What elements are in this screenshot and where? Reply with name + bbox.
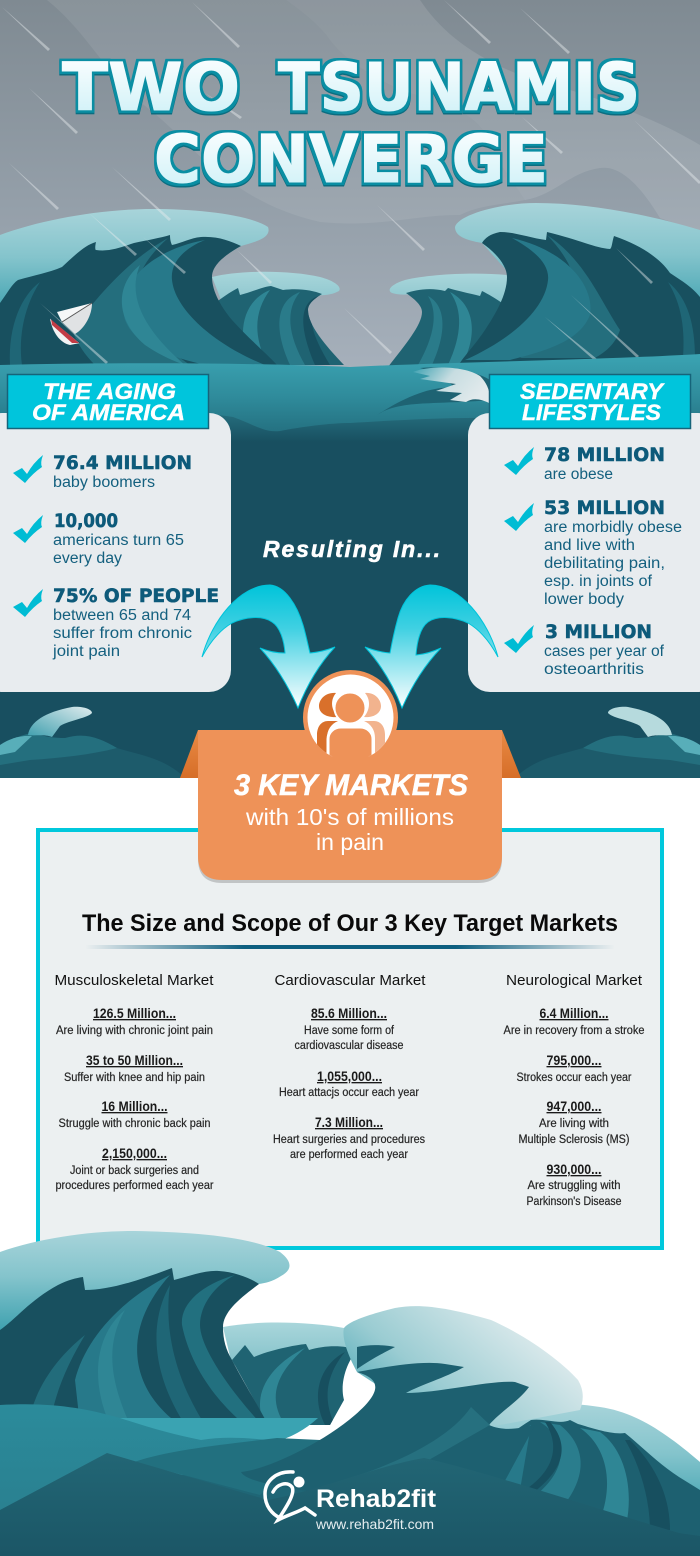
column: cardiovascular market: Cardiovascular Market xyxy=(274,972,426,989)
inner wave left xyxy=(212,272,344,365)
stat: 53 million: debilitating pain, xyxy=(544,555,665,572)
column: cardiovascular market: Heart attacjs occur each year xyxy=(279,1087,419,1099)
small wave bottom right xyxy=(515,707,700,778)
title: CONVERGE xyxy=(154,121,548,198)
badge: 3 key markets: 3 KEY MARKETS xyxy=(234,769,468,802)
column: musculoskeletal market xyxy=(54,972,214,1192)
column: musculoskeletal market: Musculoskeletal Market xyxy=(54,972,214,989)
column: neurological market: Are living with xyxy=(539,1118,609,1130)
column: musculoskeletal market: Joint or back surgeries and xyxy=(70,1165,199,1177)
badge: 3 key markets: with 10's of millions xyxy=(245,804,454,830)
title: TWO xyxy=(62,49,240,126)
stat: 53 million: are morbidly obese xyxy=(544,519,682,536)
background: stormy sky xyxy=(0,0,700,370)
column: musculoskeletal market: Struggle with chronic back pain xyxy=(58,1118,210,1130)
heading: sedentary lifestyles: LIFESTYLES xyxy=(522,400,661,425)
wave: crest tongues xyxy=(241,1345,535,1500)
stat: 53 million: and live with xyxy=(544,537,635,554)
stat: 53 million xyxy=(504,497,682,608)
panel: target markets xyxy=(38,830,662,1248)
heading: sedentary lifestyles: SEDENTARY xyxy=(520,379,665,404)
big wave left xyxy=(0,209,277,365)
column: neurological market: Parkinson's Disease xyxy=(526,1196,622,1208)
text: resulting in: Resulting In... xyxy=(263,536,440,562)
column: neurological market: 6.4 Million... xyxy=(540,1006,608,1021)
stat: 3 million: osteoarthritis xyxy=(544,661,644,678)
column: neurological market: 947,000... xyxy=(546,1099,602,1114)
wave: mid sea xyxy=(0,1404,470,1556)
logo: rehab2fit: www.rehab2fit.com xyxy=(315,1516,434,1532)
heading: the aging of america: OF AMERICA xyxy=(32,400,185,425)
sailboat xyxy=(50,303,92,345)
arrow: right xyxy=(365,585,498,708)
panel: sedentary lifestyles xyxy=(468,374,700,692)
badge: 3 key markets xyxy=(180,670,521,883)
column: musculoskeletal market: 16 Million... xyxy=(102,1099,168,1114)
column: neurological market: Are struggling with xyxy=(528,1180,620,1192)
stat: 3 million: 3 MILLION xyxy=(545,621,652,643)
panel: the aging of america xyxy=(0,374,231,692)
column: musculoskeletal market: 35 to 50 Million... xyxy=(86,1053,183,1068)
stat: 10,000: every day xyxy=(53,550,122,567)
stat: 75% of people xyxy=(13,585,219,660)
title: TSUNAMIS xyxy=(278,49,640,126)
column: neurological market: Are in recovery from a stroke xyxy=(504,1025,644,1037)
column: cardiovascular market xyxy=(273,972,426,1161)
bottom waves xyxy=(0,1231,700,1556)
icon: people xyxy=(303,670,398,765)
wave: right rear xyxy=(492,1404,700,1536)
curling wave crest xyxy=(377,367,492,415)
stat: 75% of people: suffer from chronic xyxy=(53,625,192,642)
column: cardiovascular market: 7.3 Million... xyxy=(315,1115,383,1130)
column: musculoskeletal market: Are living with chronic joint pain xyxy=(56,1025,213,1037)
column: cardiovascular market: 1,055,000... xyxy=(317,1069,382,1084)
stat: 53 million: lower body xyxy=(544,591,624,608)
stat: 10,000: americans turn 65 xyxy=(53,532,184,549)
column: neurological market xyxy=(504,972,644,1208)
rain streaks xyxy=(2,0,700,364)
column: musculoskeletal market: Suffer with knee and hip pain xyxy=(64,1072,205,1084)
stat: 10,000: 10,000 xyxy=(54,510,118,532)
column: musculoskeletal market: 126.5 Million... xyxy=(93,1006,176,1021)
wave: large right crest xyxy=(343,1306,583,1427)
logo: rehab2fit xyxy=(265,1472,437,1532)
stat: 53 million: esp. in joints of xyxy=(544,573,653,590)
column: cardiovascular market: Heart surgeries and procedures xyxy=(273,1134,425,1146)
stat: 75% of people: between 65 and 74 xyxy=(53,607,191,624)
column: neurological market: Multiple Sclerosis (MS) xyxy=(518,1134,630,1146)
heading: the aging of america: THE AGING xyxy=(43,379,176,404)
storm clouds xyxy=(47,0,700,232)
stat: 10,000 xyxy=(13,510,184,567)
stat: 76.4 million: 76.4 MILLION xyxy=(53,452,192,474)
wave: large left xyxy=(0,1231,290,1425)
column: musculoskeletal market: procedures performed each year xyxy=(56,1180,214,1192)
water and lower dark sea xyxy=(0,354,700,778)
stat: 53 million: 53 MILLION xyxy=(544,497,665,519)
column: neurological market: Strokes occur each year xyxy=(516,1072,632,1084)
arrow: left xyxy=(202,585,335,708)
stat: 3 million xyxy=(504,621,665,678)
column: cardiovascular market: 85.6 Million... xyxy=(311,1006,387,1021)
heading: size and scope: The Size and Scope of Our 3 Key Target Markets xyxy=(82,910,618,937)
column: neurological market: Neurological Market xyxy=(506,972,643,989)
stat: 78 million: are obese xyxy=(544,466,613,483)
stat: 76.4 million: baby boomers xyxy=(53,474,155,491)
heading: sedentary lifestyles xyxy=(490,374,690,428)
stat: 3 million: cases per year of xyxy=(544,643,665,660)
stat: 76.4 million xyxy=(13,452,192,491)
logo: rehab2fit: Rehab2fit xyxy=(316,1485,437,1513)
wave: second back wave xyxy=(223,1323,360,1425)
big wave right xyxy=(455,203,700,363)
stat: 75% of people: 75% OF PEOPLE xyxy=(53,585,219,607)
stat: 75% of people: joint pain xyxy=(52,643,120,660)
column: cardiovascular market: Have some form of xyxy=(304,1025,395,1037)
column: neurological market: 795,000... xyxy=(546,1053,602,1068)
inner wave right xyxy=(388,274,520,367)
column: cardiovascular market: cardiovascular disease xyxy=(294,1040,404,1052)
wave: foreground dark sea xyxy=(0,1453,700,1556)
column: neurological market: 930,000... xyxy=(546,1162,602,1177)
heading: the aging of america xyxy=(8,374,208,428)
column: musculoskeletal market: 2,150,000... xyxy=(102,1146,167,1161)
title xyxy=(62,49,640,198)
logo mark xyxy=(265,1472,315,1520)
column: cardiovascular market: are performed each year xyxy=(290,1149,408,1161)
badge: 3 key markets: in pain xyxy=(316,829,384,855)
small wave bottom left xyxy=(0,707,185,778)
stat: 78 million xyxy=(504,444,665,483)
stat: 78 million: 78 MILLION xyxy=(544,444,665,466)
